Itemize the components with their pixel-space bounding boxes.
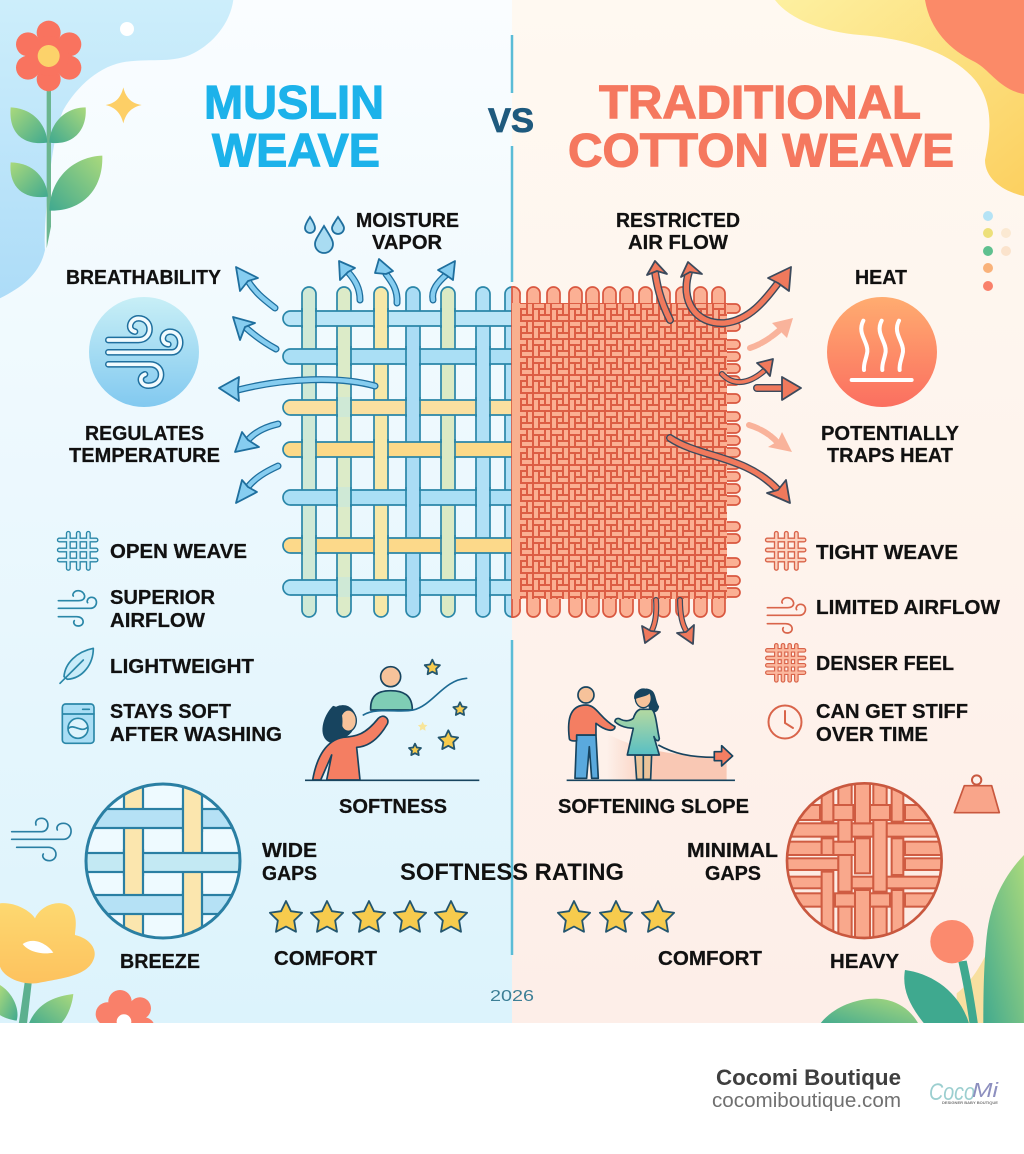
label: softening slope: SOFTENING SLOPE xyxy=(558,795,749,818)
label: potentially traps heat xyxy=(821,422,959,467)
title: Muslin Weave: WEAVE xyxy=(212,124,380,178)
label: regulates temperature xyxy=(69,422,220,467)
text: superior airflow: AIRFLOW xyxy=(110,609,206,632)
text: lightweight: LIGHTWEIGHT xyxy=(110,655,254,678)
label: breeze: BREEZE xyxy=(120,950,200,973)
label: softness: SOFTNESS xyxy=(339,795,447,818)
label: wide gaps: GAPS xyxy=(262,862,317,885)
text: stays soft after washing: AFTER WASHING xyxy=(110,723,282,746)
decoration: yellow sparkle xyxy=(106,87,142,123)
footer: website: cocomiboutique.com xyxy=(712,1090,901,1112)
label: restricted air flow: RESTRICTED xyxy=(616,209,740,232)
background: cotton side xyxy=(512,0,1024,1023)
arrow: long airflow left xyxy=(219,377,375,401)
decoration: bottom-right plants xyxy=(820,855,1024,1027)
label: minimal gaps: MINIMAL xyxy=(687,839,778,862)
arrow: moisture vapor left xyxy=(339,261,360,300)
arrow: restricted air flow left xyxy=(647,261,670,320)
arrow: moisture vapor center xyxy=(375,259,397,303)
text: superior airflow: SUPERIOR xyxy=(110,586,215,609)
decoration: palette dots xyxy=(983,211,1011,291)
arrow: lower-left one xyxy=(235,424,278,452)
decoration: top-left flower xyxy=(10,21,102,248)
title: vs: VS xyxy=(488,102,534,140)
icon: wind circle xyxy=(89,297,199,407)
arrow: small curved heat xyxy=(722,359,773,382)
arrow: bottom right xyxy=(677,600,694,644)
arrow: straight heat xyxy=(757,377,801,400)
footer: logo: Mi xyxy=(972,1080,999,1102)
chart: open muslin weave swatch xyxy=(283,287,523,617)
feature list: cotton xyxy=(767,533,1001,746)
center divider xyxy=(511,35,513,955)
icon: water drops xyxy=(305,217,344,253)
icon: limited airflow xyxy=(767,598,805,633)
decoration: top-left blue blob xyxy=(0,0,233,298)
icon: tight weave xyxy=(767,533,804,568)
text: can get stiff over time: CAN GET STIFF xyxy=(816,700,968,723)
icon: washing machine xyxy=(62,704,94,743)
label: potentially traps heat: TRAPS HEAT xyxy=(827,444,953,467)
label: restricted air flow xyxy=(616,209,740,254)
arrow: pale dashed up xyxy=(750,318,793,348)
arrow: breathability left xyxy=(233,317,276,349)
label: heavy: HEAVY xyxy=(830,950,899,973)
footer: logo: DESIGNER BABY BOUTIQUE xyxy=(942,1101,999,1105)
arrow: lower-left two xyxy=(236,466,278,503)
chart: tight cotton weave swatch xyxy=(512,287,740,617)
chart: muslin close-up circle xyxy=(84,782,242,940)
label: moisture vapor xyxy=(356,209,459,254)
text: stays soft after washing: STAYS SOFT xyxy=(110,700,231,723)
heading: softness rating: SOFTNESS RATING xyxy=(400,859,624,886)
background: muslin side xyxy=(0,0,512,1023)
rating: muslin five stars xyxy=(270,901,467,932)
text: denser feel: DENSER FEEL xyxy=(816,652,954,675)
arrow: pale dashed down xyxy=(749,425,792,452)
icon: weight xyxy=(954,775,999,813)
icon: airflow xyxy=(58,591,96,626)
label: regulates temperature: TEMPERATURE xyxy=(69,444,220,467)
label: comfort cotton: COMFORT xyxy=(658,947,762,970)
label: wide gaps: WIDE xyxy=(262,839,317,862)
icon: clock xyxy=(768,706,802,738)
label: regulates temperature: REGULATES xyxy=(85,422,204,445)
text: limited airflow: LIMITED AIRFLOW xyxy=(816,596,1001,619)
label: moisture vapor: MOISTURE xyxy=(356,209,459,232)
label: minimal gaps: GAPS xyxy=(705,862,761,885)
arrow: long heat down xyxy=(670,438,790,503)
year: 2026 xyxy=(490,988,534,1005)
title: Traditional Cotton Weave: COTTON WEAVE xyxy=(568,124,954,178)
label: minimal gaps xyxy=(687,839,778,885)
arrow: moisture vapor right xyxy=(433,261,455,300)
illustration: softness xyxy=(305,660,479,780)
arrow: curved double arrow xyxy=(681,262,791,323)
footer: logo: Coco xyxy=(929,1079,975,1106)
title: Traditional Cotton Weave xyxy=(568,76,954,178)
label: moisture vapor: VAPOR xyxy=(372,231,442,254)
decoration: top-right blobs xyxy=(775,0,1024,196)
arrow: breathability up-left xyxy=(236,267,275,308)
icon: denser feel xyxy=(767,645,804,680)
text: can get stiff over time xyxy=(816,700,968,746)
label: heat: HEAT xyxy=(855,266,907,289)
label: breathability: BREATHABILITY xyxy=(66,266,221,289)
feature list: muslin xyxy=(58,533,282,746)
illustration: softening slope xyxy=(567,687,735,780)
label: restricted air flow: AIR FLOW xyxy=(628,231,729,254)
label: comfort muslin: COMFORT xyxy=(274,947,377,970)
decoration: white dot xyxy=(120,22,134,36)
title: Muslin Weave xyxy=(204,76,384,178)
title: Traditional Cotton Weave: TRADITIONAL xyxy=(599,76,921,130)
icon: breeze wind lines xyxy=(12,818,71,861)
footer band xyxy=(0,1023,1024,1154)
title: Muslin Weave: MUSLIN xyxy=(204,76,384,130)
label: potentially traps heat: POTENTIALLY xyxy=(821,422,959,445)
decoration: bottom-left flowers xyxy=(0,903,155,1040)
text: stays soft after washing xyxy=(110,700,282,746)
text: open weave: OPEN WEAVE xyxy=(110,540,247,563)
text: tight weave: TIGHT WEAVE xyxy=(816,541,958,564)
footer: brand name: Cocomi Boutique xyxy=(716,1065,901,1090)
icon: open weave xyxy=(59,533,96,568)
icon: heat circle xyxy=(827,297,937,407)
icon: feather xyxy=(60,648,93,683)
text: superior airflow xyxy=(110,586,215,632)
rating: cotton three stars xyxy=(558,901,674,932)
chart: cotton close-up circle xyxy=(783,780,945,940)
text: can get stiff over time: OVER TIME xyxy=(816,723,928,746)
arrow: bottom left xyxy=(642,600,660,643)
label: wide gaps xyxy=(262,839,317,885)
